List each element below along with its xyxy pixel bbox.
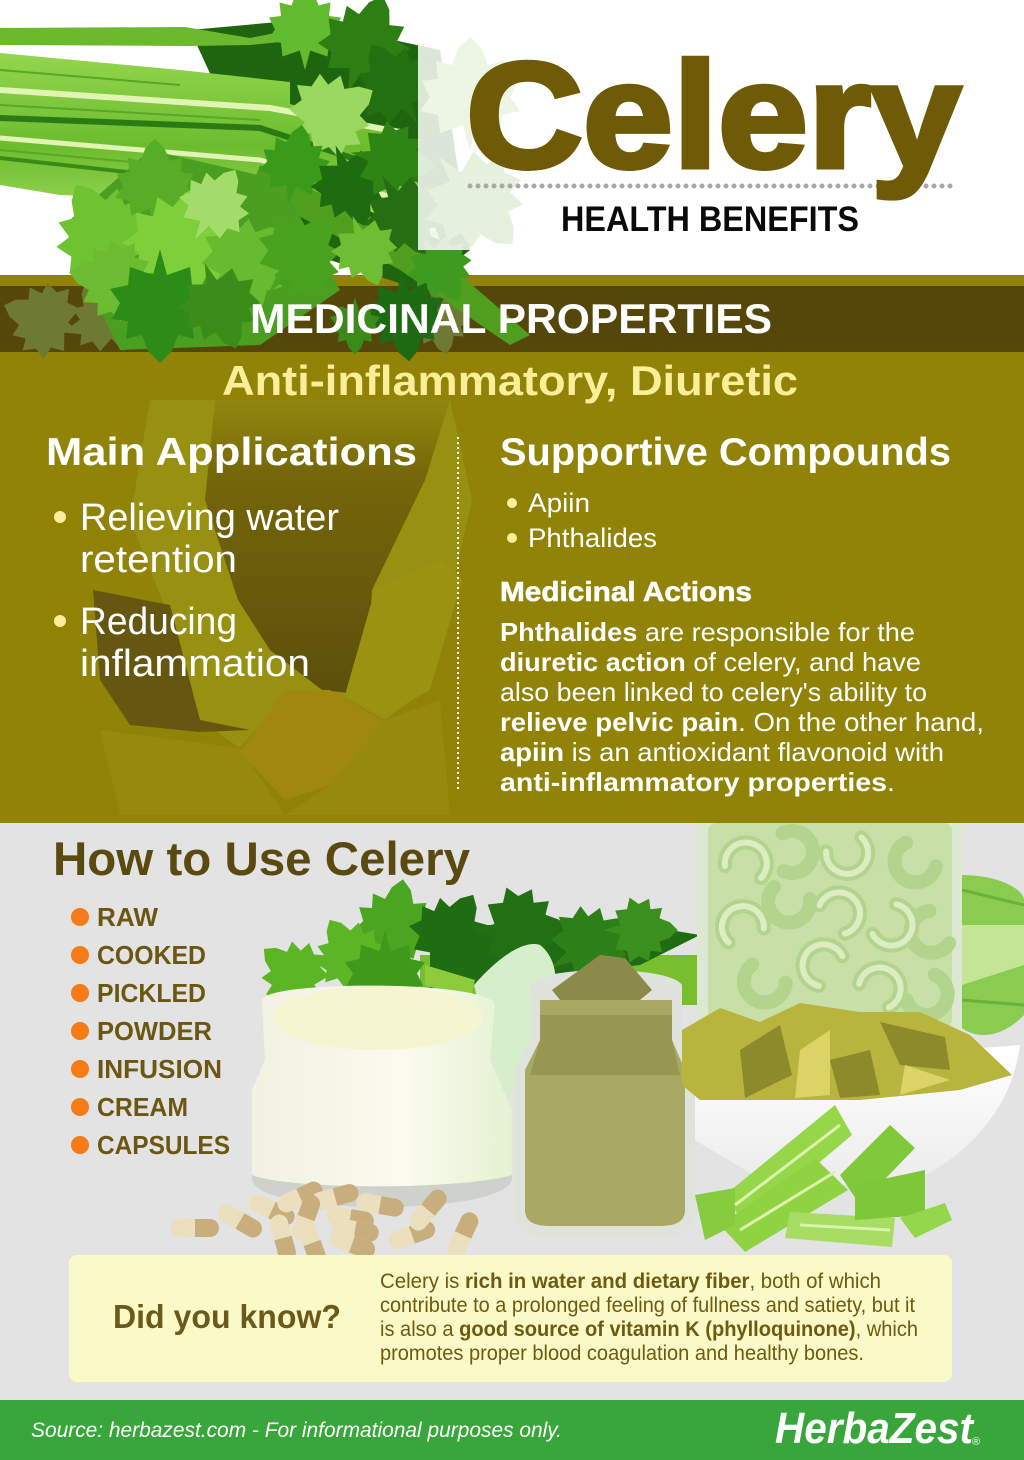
cream jar xyxy=(252,986,512,1207)
heading: Celery: Celery xyxy=(466,31,961,199)
photo: celery bunch xyxy=(0,0,551,370)
heading: how to use celery: How to Use Celery xyxy=(53,832,470,885)
logo: HerbaZest: HerbaZest xyxy=(775,1404,975,1453)
subheading: anti-inflammatory, diuretic: Anti-inflammatory, Diuretic xyxy=(222,357,798,404)
compound list xyxy=(507,488,657,553)
list: ways to use celery: CAPSULES xyxy=(97,1130,230,1160)
bullet list: inflammation xyxy=(80,643,310,685)
subheading: health benefits: HEALTH BENEFITS xyxy=(561,200,859,239)
list: ways to use celery xyxy=(71,902,230,1160)
compound list: Phthalides xyxy=(528,523,657,553)
list: ways to use celery: COOKED xyxy=(97,940,206,970)
heading: Did you know? xyxy=(113,1298,341,1335)
celery stalk, right edge xyxy=(962,875,1024,1035)
bowl of cooked celery xyxy=(682,1003,1020,1185)
medicinal actions text: also been linked to celery's ability to xyxy=(500,677,927,707)
pickled celery jar xyxy=(697,823,962,1028)
medicinal actions text: relieve pelvic pain . On the other hand, xyxy=(500,707,984,737)
powder jar xyxy=(515,955,695,1236)
fact text: Celery is rich in water and dietary fiber, both of which xyxy=(380,1270,881,1293)
bullet list: Reducing xyxy=(80,601,237,643)
fact text: promotes proper blood coagulation and healthy bones. xyxy=(380,1342,864,1365)
medicinal actions text: Phthalides are responsible for the xyxy=(500,617,915,647)
medicinal actions text: anti-inflammatory properties . xyxy=(500,767,895,797)
medicinal actions heading: Medicinal Actions xyxy=(500,576,752,607)
list: ways to use celery: CREAM xyxy=(97,1092,188,1122)
heading: medicinal properties: MEDICINAL PROPERTIES xyxy=(250,295,772,342)
fact text: contribute to a prolonged feeling of fullness and satiety, but it xyxy=(380,1294,915,1317)
list: ways to use celery: PICKLED xyxy=(97,978,206,1008)
title xyxy=(466,31,961,239)
registered mark: ® xyxy=(972,1436,980,1448)
footer xyxy=(31,1404,980,1453)
panel: did you know xyxy=(69,1255,952,1382)
list: ways to use celery: INFUSION xyxy=(97,1054,222,1084)
panel: main applications xyxy=(46,431,417,685)
photo: celery preparations xyxy=(171,823,1024,1269)
fact text xyxy=(380,1270,918,1365)
medicinal actions text: apiin is an antioxidant flavonoid with xyxy=(500,737,944,767)
translucent white panel xyxy=(401,28,551,277)
source note: Source: herbazest.com - For informational purposes only. xyxy=(31,1419,562,1442)
faded leaves over band xyxy=(0,265,476,370)
dark band: medicinal properties xyxy=(0,286,1024,352)
fact text: is also a good source of vitamin K (phylloquinone), which xyxy=(380,1318,918,1341)
cut celery sticks xyxy=(695,1105,952,1252)
heading: Main Applications xyxy=(46,431,417,474)
photo: man holding pelvis, olive tint xyxy=(93,400,472,815)
bullet list xyxy=(54,497,339,685)
bullet list: retention xyxy=(80,539,237,581)
dotted rule xyxy=(470,184,958,188)
capsules xyxy=(171,1179,481,1269)
panel: supportive compounds xyxy=(500,431,984,797)
list: ways to use celery: RAW xyxy=(97,902,158,932)
bullet list: Relieving water xyxy=(80,497,339,539)
celery leaves xyxy=(33,0,487,365)
heading: Supportive Compounds xyxy=(500,431,951,474)
list: ways to use celery: POWDER xyxy=(97,1016,212,1046)
medicinal actions text xyxy=(500,617,984,797)
compound list: Apiin xyxy=(528,488,590,518)
medicinal actions text: diuretic action of celery, and have xyxy=(500,647,921,677)
celery stalks xyxy=(0,20,530,345)
fresh celery leaves xyxy=(241,872,700,1027)
translucent leaf behind jars xyxy=(474,944,556,1110)
